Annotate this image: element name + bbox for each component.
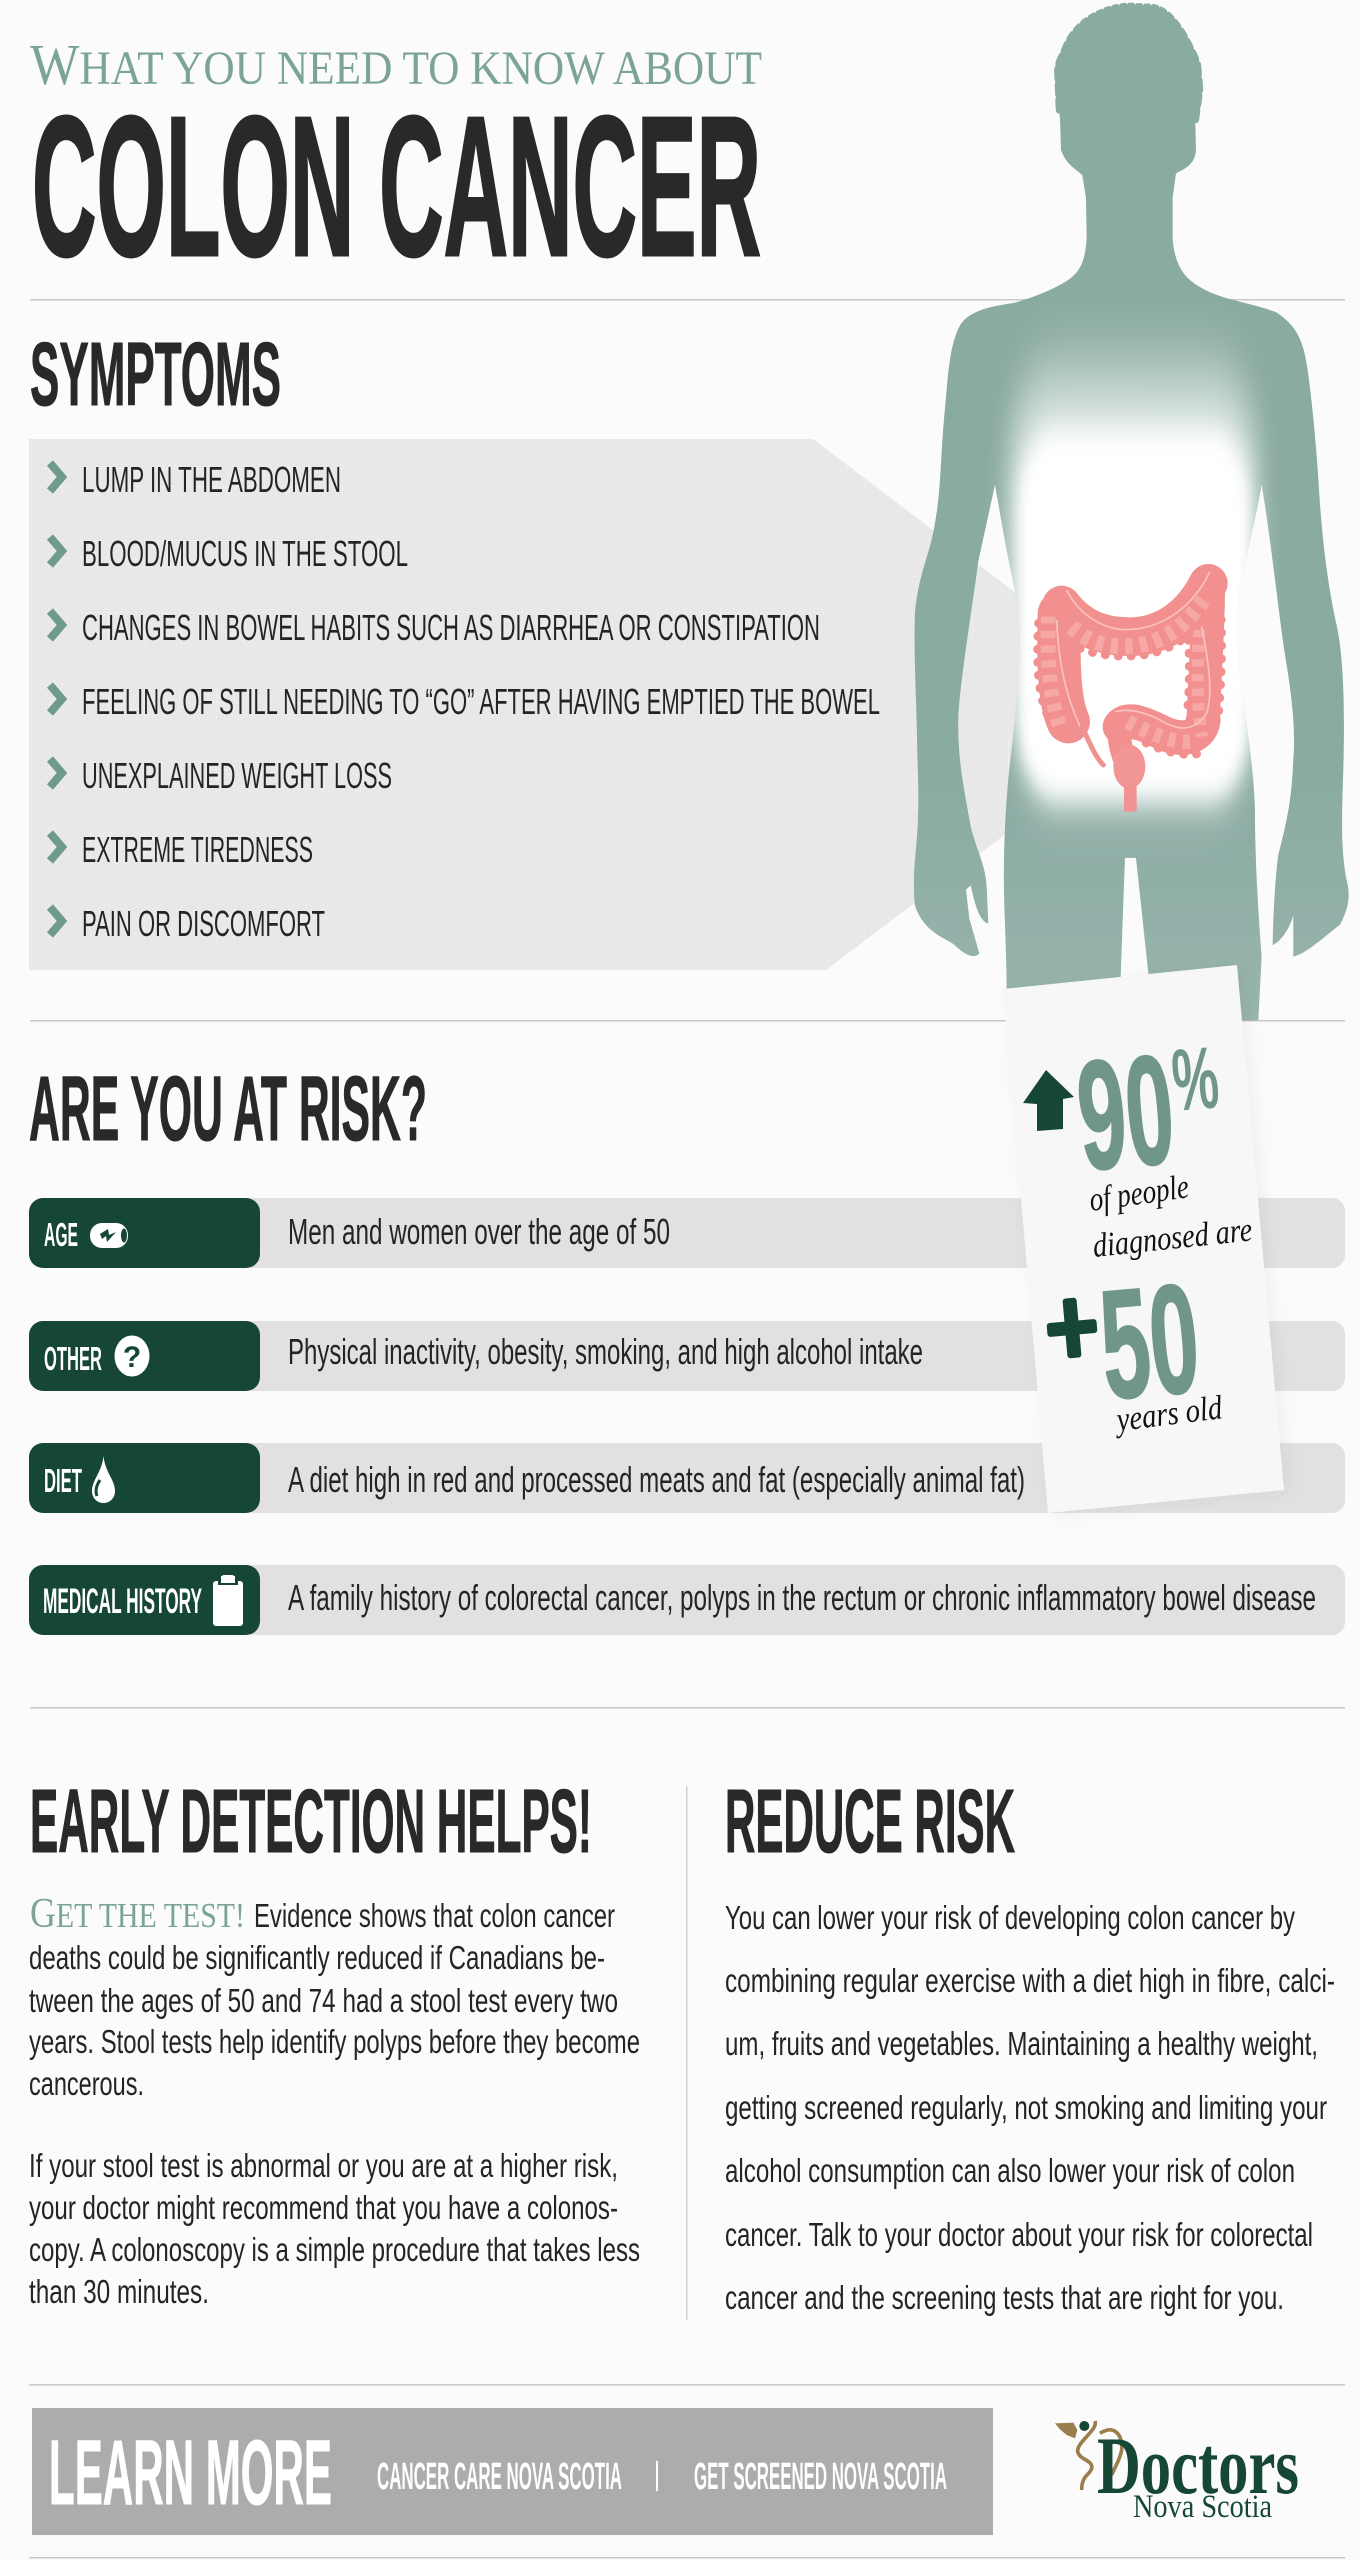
column divider [686, 1786, 688, 2320]
icon: up arrow [1023, 1070, 1074, 1131]
symptom item 5: UNEXPLAINED WEIGHT LOSS [82, 755, 392, 796]
symptom item 3 [50, 607, 820, 648]
text block: reduce risk [725, 1899, 1335, 2316]
symptom item 7: PAIN OR DISCOMFORT [82, 903, 325, 944]
icon: caduceus [1055, 2421, 1122, 2490]
icon: drop [92, 1456, 115, 1503]
learn more banner: LEARN MORE [49, 2422, 332, 2524]
row: diet: DIET [44, 1462, 82, 1499]
caption: of people diagnosed are: of people [1087, 1168, 1191, 1219]
colon lighter segments [1048, 600, 1203, 742]
text block: early detection: tween the ages of 50 and 74 had a stool test every two [29, 1982, 618, 2019]
text: REDUCE RISK [725, 1772, 1015, 1872]
symptom item 2 [50, 533, 408, 574]
title block [30, 32, 762, 298]
symptom item 2: BLOOD/MUCUS IN THE STOOL [82, 533, 408, 574]
row: other: Physical inactivity, obesity, smoking, and high alcohol intake [288, 1331, 923, 1372]
symptoms list [50, 459, 880, 944]
symptom item 4 [50, 681, 880, 722]
stat: 90 percent: % [1168, 1027, 1222, 1130]
text block: early detection: If your stool test is abnormal or you are at a higher risk, [29, 2147, 618, 2184]
symptom item 4: FEELING OF STILL NEEDING TO “GO” AFTER HAVING EMPTIED THE BOWEL [82, 681, 880, 722]
risk factor rows [29, 1198, 1345, 1635]
row: diet [29, 1443, 1345, 1513]
symptom item 5 [50, 755, 392, 796]
row: diet: A diet high in red and processed meats and fat (especially animal fat) [288, 1459, 1025, 1500]
symptom item 1 [50, 459, 341, 500]
title kicker: WHAT YOU NEED TO KNOW ABOUT [30, 32, 762, 97]
stat: 50: 50 [1094, 1251, 1206, 1432]
row: age [29, 1198, 1345, 1268]
text block: early detection: than 30 minutes. [29, 2273, 209, 2310]
logo: Doctors Nova Scotia [1055, 2420, 1299, 2525]
caption: of people diagnosed are [1087, 1168, 1254, 1265]
icon: clipboard [213, 1575, 243, 1626]
row: medical history [29, 1565, 1345, 1635]
panel: symptoms arrow background [29, 439, 1170, 970]
text block: early detection: your doctor might recommend that you have a colonos- [29, 2189, 618, 2226]
icon: question mark [114, 1336, 150, 1376]
row: medical history: MEDICAL HISTORY [43, 1582, 202, 1621]
symptom item 7 [50, 903, 325, 944]
learn more banner: CANCER CARE NOVA SCOTIA [377, 2456, 622, 2498]
text: ARE YOU AT RISK? [29, 1058, 427, 1160]
symptom item 3: CHANGES IN BOWEL HABITS SUCH AS DIARRHEA OR CONSTIPATION [82, 607, 820, 648]
colon illustration [1038, 572, 1222, 812]
caption: of people diagnosed are: diagnosed are [1091, 1211, 1254, 1265]
learn more banner [32, 2408, 993, 2535]
text block: early detection: copy. A colonoscopy is a simple procedure that takes less [29, 2231, 640, 2268]
symptom item 6 [50, 829, 313, 870]
symptom item 1: LUMP IN THE ABDOMEN [82, 459, 341, 500]
row: age: Men and women over the age of 50 [288, 1211, 670, 1252]
icon: battery [90, 1223, 128, 1248]
text block: early detection: years. Stool tests help identify polyps before they become [29, 2023, 640, 2060]
human body silhouette with glow [914, 2, 1349, 1020]
symptom item 6: EXTREME TIREDNESS [82, 829, 313, 870]
text: EARLY DETECTION HELPS! [30, 1772, 592, 1872]
text block: early detection: deaths could be significantly reduced if Canadians be- [29, 1939, 605, 1976]
row: age: AGE [44, 1216, 78, 1253]
logo: Doctors Nova Scotia: Nova Scotia [1133, 2489, 1272, 2525]
text block: early detection [29, 1891, 640, 2310]
text: SYMPTOMS [30, 325, 281, 425]
caption: years old: years old [1112, 1389, 1225, 1439]
icon: plus sign [1044, 1296, 1100, 1360]
row: other: OTHER [44, 1340, 102, 1377]
get the test lead-in: GET THE TEST! [30, 1891, 245, 1937]
callout card: 90% over 50 [1003, 965, 1284, 1513]
learn more banner: GET SCREENED NOVA SCOTIA [694, 2456, 947, 2498]
text block: early detection: cancerous. [29, 2065, 144, 2102]
text block: early detection: Evidence shows that colon cancer [254, 1897, 615, 1934]
icon: question mark: ? [123, 1341, 141, 1374]
stat: 90 percent: 90 [1071, 1022, 1181, 1203]
colon outer haustra bumps [1038, 607, 1222, 754]
row: other [29, 1321, 1345, 1391]
